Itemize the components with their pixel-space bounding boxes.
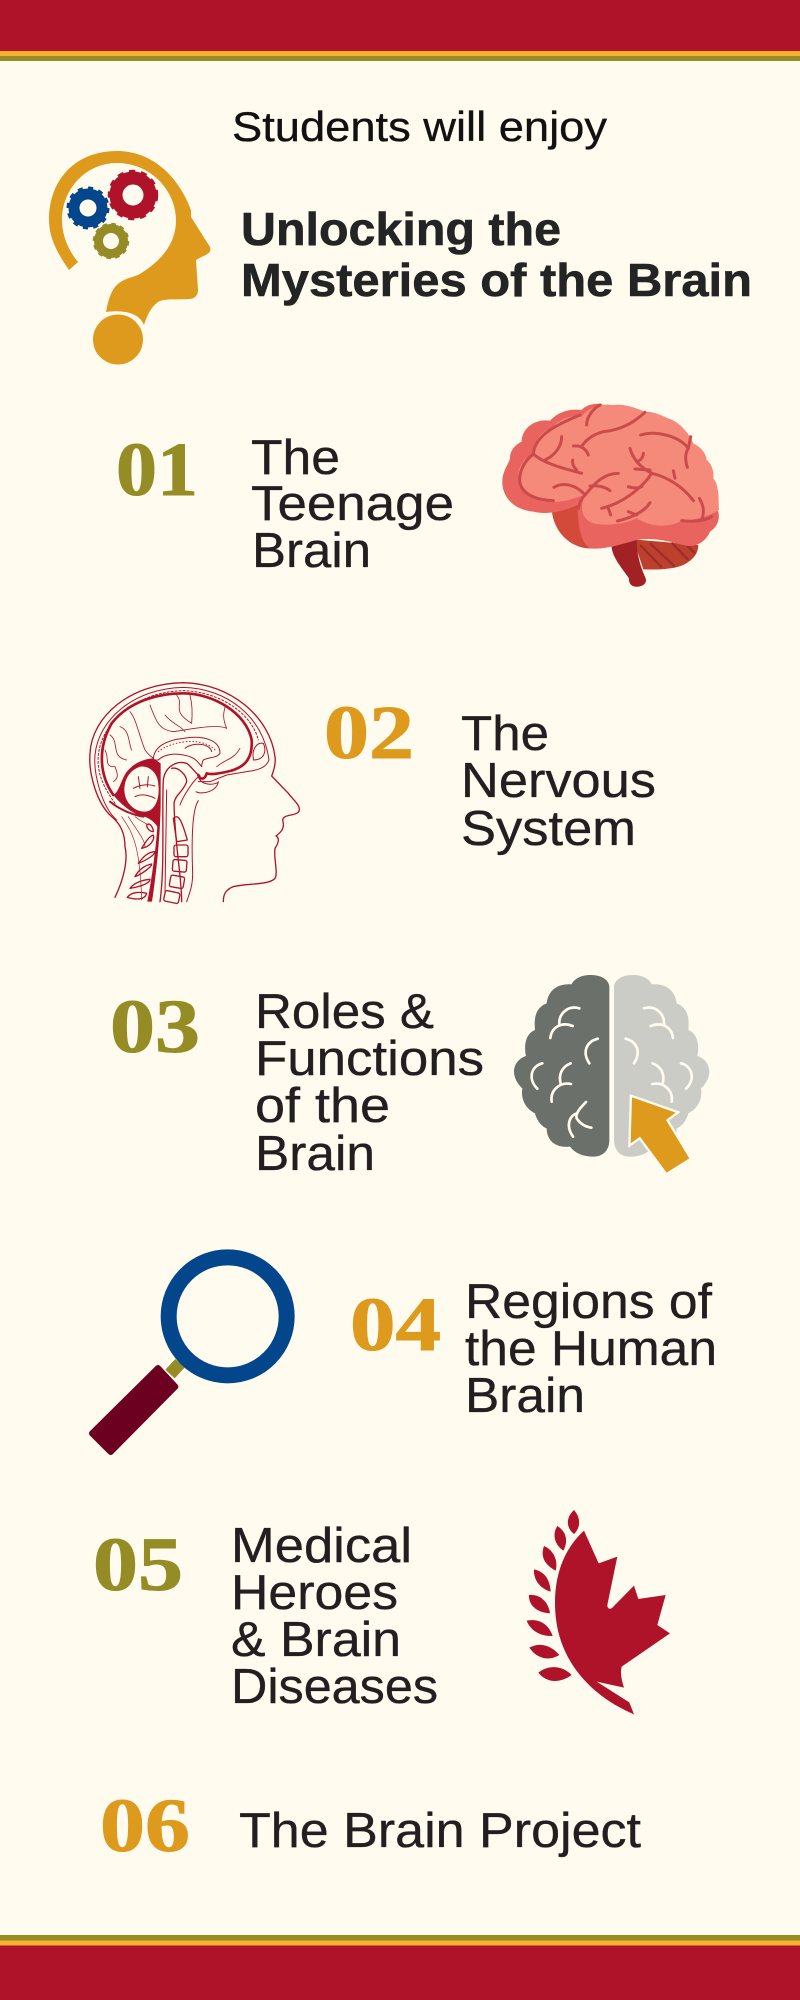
heading: Regions of the Human Brain [465, 1275, 717, 1423]
title [241, 203, 752, 306]
heading: Regions of the Human Brain: Regions of [465, 1275, 712, 1329]
heading: Medical Heroes & Brain Diseases: Medical [231, 1519, 412, 1573]
icon: olive gear [94, 224, 128, 258]
cerebellum and brain stem [113, 758, 161, 902]
heading: The Nervous System: System [461, 802, 636, 856]
heading: The Brain Project: The Brain Project [239, 1804, 641, 1858]
vertebrae [127, 817, 188, 904]
heading: Regions of the Human Brain: Brain [465, 1369, 585, 1423]
heading: Roles & Functions of the Brain [255, 985, 484, 1181]
icon: two-tone brain with arrow [514, 975, 709, 1173]
icon: maple leaf with laurel [527, 1510, 670, 1714]
title: Unlocking the [241, 203, 561, 255]
number 06: 06 [100, 1784, 190, 1868]
top banner [0, 0, 800, 61]
heading: Medical Heroes & Brain Diseases: & Brain [231, 1613, 401, 1667]
icon: magnifying glass [92, 1257, 287, 1452]
number 01: 01 [116, 428, 198, 512]
icon: head with gears question mark [49, 151, 210, 364]
icon: pink brain [502, 404, 719, 587]
heading: The Teenage Brain: Teenage [251, 477, 454, 531]
number 05: 05 [93, 1523, 183, 1607]
heading: The Teenage Brain: The [251, 431, 340, 485]
heading: Roles & Functions of the Brain: of the [255, 1079, 390, 1133]
icon: blue gear [68, 188, 108, 228]
heading: Roles & Functions of the Brain: Roles & [255, 985, 434, 1039]
heading: Roles & Functions of the Brain: Functions [255, 1032, 484, 1086]
heading: The Nervous System: Nervous [461, 754, 656, 808]
heading: The Teenage Brain: Brain [252, 524, 371, 578]
number 02: 02 [324, 691, 414, 775]
number 03: 03 [110, 985, 200, 1069]
bottom banner [0, 1935, 800, 2000]
heading: Regions of the Human Brain: the Human [465, 1322, 717, 1376]
spinal cord [160, 762, 200, 902]
number 04: 04 [350, 1283, 441, 1367]
corpus callosum [153, 737, 220, 767]
brain folds [105, 695, 240, 782]
heading: Medical Heroes & Brain Diseases [231, 1519, 438, 1714]
icon: anatomical head cross-section [90, 683, 299, 904]
heading: Medical Heroes & Brain Diseases: Heroes [231, 1566, 398, 1620]
icon: red gear [110, 172, 156, 218]
arrow [631, 1097, 689, 1173]
heading: The Nervous System: The [461, 707, 549, 761]
heading: Roles & Functions of the Brain: Brain [255, 1127, 375, 1181]
heading: The Nervous System [461, 707, 656, 856]
title: Mysteries of the Brain [241, 254, 752, 306]
heading: Medical Heroes & Brain Diseases: Diseases [231, 1660, 438, 1714]
heading: The Teenage Brain [251, 431, 454, 578]
subtitle: Students will enjoy [232, 103, 607, 150]
